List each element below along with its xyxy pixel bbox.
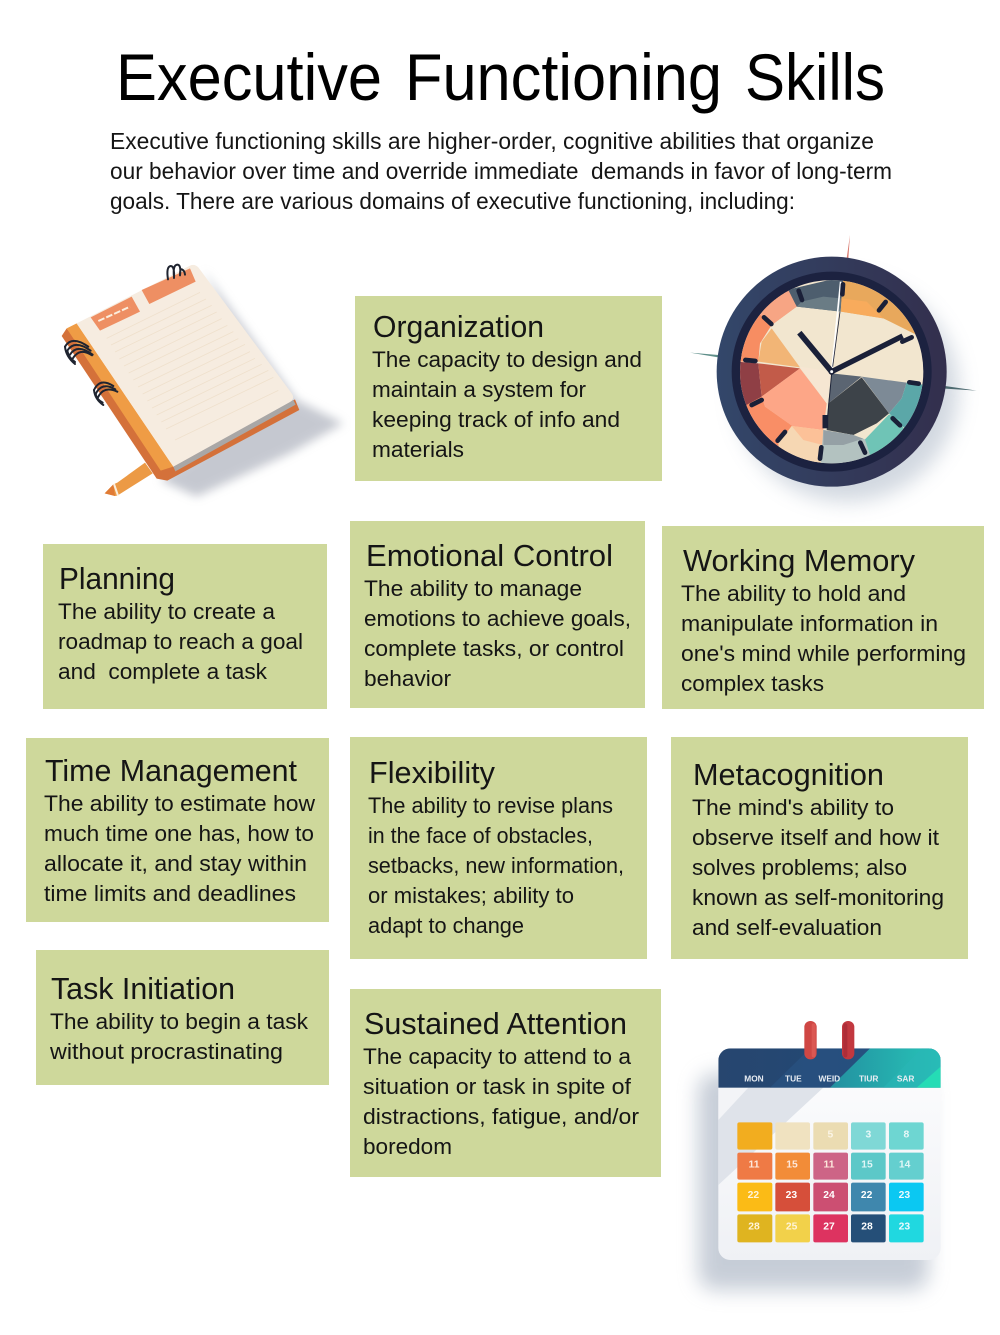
title: Executive bbox=[116, 40, 382, 114]
weekday labels: SAR bbox=[897, 1074, 914, 1084]
calendar date grid: 23 bbox=[899, 1221, 910, 1232]
text: organization description: materials bbox=[372, 437, 464, 462]
text: organization description bbox=[372, 347, 642, 462]
heading: metacognition: Metacognition bbox=[693, 757, 884, 792]
text: planning description: and complete a task bbox=[58, 659, 268, 684]
heading: planning: Planning bbox=[59, 561, 175, 596]
text: working memory description: manipulate information in bbox=[681, 611, 938, 636]
text: sustained attention description: distractions, fatigue, and/or bbox=[363, 1104, 640, 1129]
calendar date grid: 25 bbox=[786, 1221, 798, 1232]
panel: flexibility bbox=[350, 737, 647, 959]
text: task initiation description bbox=[49, 1009, 309, 1064]
title: Skills bbox=[745, 40, 885, 114]
calendar date grid: 22 bbox=[861, 1190, 873, 1201]
calendar date grid: 28 bbox=[861, 1221, 873, 1232]
panel: metacognition bbox=[671, 737, 968, 959]
weekday labels bbox=[744, 1074, 914, 1084]
text: organization description: maintain a system for bbox=[372, 377, 587, 402]
panel: time management bbox=[26, 738, 329, 922]
intro paragraph bbox=[110, 128, 892, 214]
intro paragraph: Executive functioning skills are higher-order, cognitive abilities that organize bbox=[110, 128, 874, 154]
text: working memory description: one's mind while performing bbox=[681, 641, 966, 666]
text: emotional control description bbox=[364, 576, 631, 691]
text: metacognition description: solves problems; also bbox=[692, 855, 907, 880]
text: task initiation description: without procrastinating bbox=[49, 1039, 283, 1064]
calendar date grid bbox=[737, 1122, 924, 1242]
calendar date grid: 5 bbox=[827, 1129, 833, 1140]
text: working memory description bbox=[681, 581, 966, 696]
intro paragraph: goals. There are various domains of executive functioning, including: bbox=[110, 188, 795, 214]
heading: task initiation: Task Initiation bbox=[51, 971, 235, 1006]
calendar date grid: 3 bbox=[865, 1129, 871, 1140]
text: flexibility description: setbacks, new information, bbox=[368, 853, 624, 878]
clock hands bbox=[799, 333, 903, 374]
panel: sustained attention bbox=[350, 989, 661, 1177]
calendar date grid: 24 bbox=[823, 1190, 835, 1201]
text: time management description bbox=[44, 791, 316, 906]
text: metacognition description bbox=[692, 795, 944, 940]
panel: task initiation bbox=[36, 950, 329, 1085]
text: time management description: much time one has, how to bbox=[44, 821, 314, 846]
text: working memory description: complex tasks bbox=[681, 671, 824, 696]
text: organization description: The capacity to design and bbox=[372, 347, 642, 372]
heading: time management: Time Management bbox=[45, 753, 297, 788]
text: metacognition description: known as self-monitoring bbox=[692, 885, 944, 910]
panel: planning bbox=[43, 544, 327, 709]
title: Functioning bbox=[405, 40, 722, 114]
weekday labels: TIUR bbox=[859, 1074, 878, 1084]
heading: flexibility: Flexibility bbox=[369, 755, 495, 790]
text: planning description: The ability to create a bbox=[58, 599, 275, 624]
panel: organization bbox=[355, 296, 662, 481]
calendar date grid: 14 bbox=[899, 1160, 911, 1171]
heading: sustained attention: Sustained Attention bbox=[364, 1006, 627, 1041]
text: task initiation description: The ability to begin a task bbox=[50, 1009, 309, 1034]
panel: working memory bbox=[662, 526, 984, 709]
text: emotional control description: The ability to manage bbox=[364, 576, 582, 601]
icon: calendar bbox=[698, 1021, 941, 1290]
heading: emotional control: Emotional Control bbox=[366, 538, 613, 573]
text: time management description: allocate it, and stay within bbox=[44, 851, 307, 876]
calendar date grid: 15 bbox=[786, 1160, 798, 1171]
text: working memory description: The ability to hold and bbox=[681, 581, 906, 606]
text: emotional control description: behavior bbox=[364, 666, 452, 691]
text: flexibility description: or mistakes; ability to bbox=[368, 883, 574, 908]
text: sustained attention description: boredom bbox=[363, 1134, 452, 1159]
text: flexibility description: adapt to change bbox=[368, 913, 524, 938]
weekday labels: TUE bbox=[785, 1074, 802, 1084]
text: sustained attention description: The capacity to attend to a bbox=[363, 1044, 631, 1069]
weekday labels: WEID bbox=[818, 1074, 840, 1084]
calendar date grid: 22 bbox=[748, 1190, 759, 1201]
calendar date grid: 11 bbox=[749, 1160, 760, 1171]
text: planning description: roadmap to reach a goal bbox=[58, 629, 303, 654]
calendar date grid: 15 bbox=[861, 1160, 873, 1171]
calendar date grid: 23 bbox=[899, 1190, 910, 1201]
calendar date grid: 8 bbox=[903, 1129, 909, 1140]
calendar rings bbox=[804, 1021, 854, 1059]
text: flexibility description: in the face of obstacles, bbox=[368, 823, 593, 848]
icon: notebook with pen bbox=[62, 265, 343, 497]
text: time management description: The ability to estimate how bbox=[44, 791, 316, 816]
heading: working memory: Working Memory bbox=[683, 543, 915, 578]
text: sustained attention description: situation or task in spite of bbox=[363, 1074, 632, 1099]
weekday labels: MON bbox=[744, 1074, 764, 1084]
text: metacognition description: observe itself and how it bbox=[692, 825, 940, 850]
text: emotional control description: complete tasks, or control bbox=[364, 636, 624, 661]
intro paragraph: our behavior over time and override immediate demands in favor of long-term bbox=[110, 158, 892, 184]
calendar date grid: 11 bbox=[824, 1160, 835, 1171]
calendar date grid: 27 bbox=[823, 1221, 835, 1232]
text: time management description: time limits and deadlines bbox=[44, 881, 296, 906]
calendar date grid: 28 bbox=[748, 1221, 760, 1232]
panel: emotional control bbox=[350, 521, 645, 708]
text: flexibility description: The ability to revise plans bbox=[368, 793, 613, 818]
text: flexibility description bbox=[368, 793, 624, 938]
icon: wall clock bbox=[690, 235, 977, 502]
heading: organization: Organization bbox=[373, 309, 544, 344]
text: organization description: keeping track of info and bbox=[372, 407, 620, 432]
text: emotional control description: emotions to achieve goals, bbox=[364, 606, 631, 631]
calendar date grid: 23 bbox=[786, 1190, 797, 1201]
text: sustained attention description bbox=[363, 1044, 640, 1159]
text: metacognition description: The mind's ability to bbox=[692, 795, 894, 820]
text: metacognition description: and self-evaluation bbox=[692, 915, 882, 940]
text: planning description bbox=[58, 599, 303, 684]
